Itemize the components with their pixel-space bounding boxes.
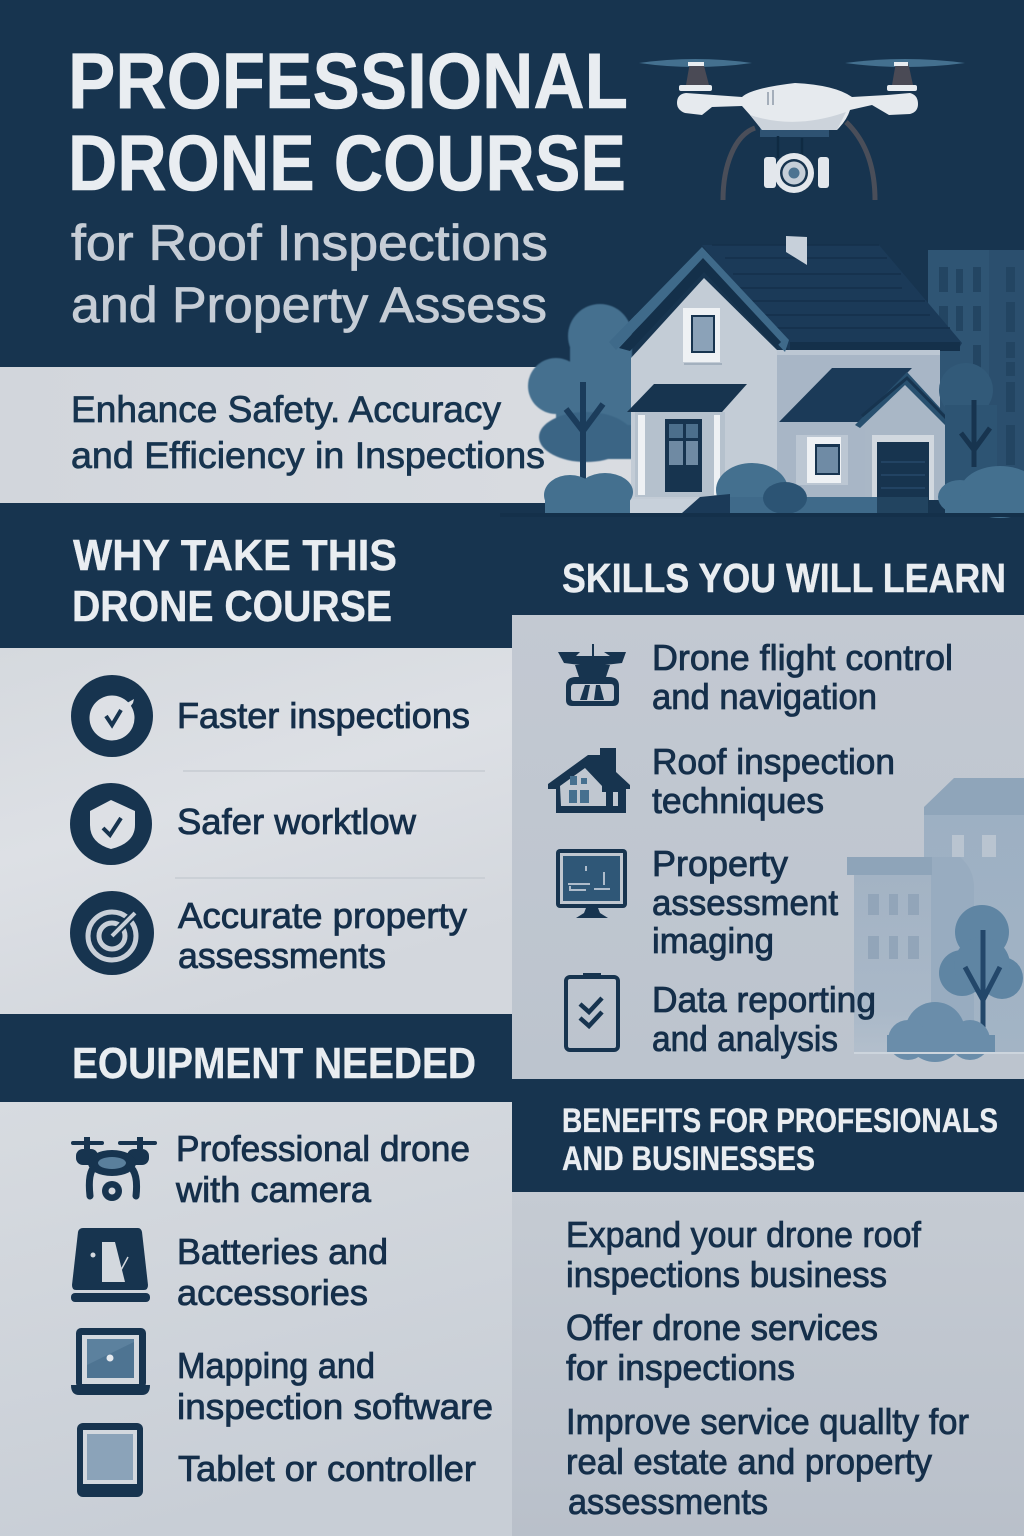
gable trim xyxy=(609,247,789,352)
icon: monitor xyxy=(556,849,627,918)
heading: equipment needed xyxy=(0,1014,512,1102)
item: mapping and inspection software: Mapping and xyxy=(177,1345,375,1386)
item: property assessment imaging xyxy=(652,843,838,961)
item: data reporting and analysis: Data reporting xyxy=(652,979,876,1020)
porch roof xyxy=(627,384,747,412)
item: accurate property assessments: assessments xyxy=(178,935,386,976)
right wing wall xyxy=(777,350,940,500)
icon: house xyxy=(548,748,630,813)
panel: subtitle band xyxy=(0,367,636,503)
heading text: equipment needed: EOUIPMENT NEEDED xyxy=(72,1039,476,1088)
item: faster inspections: Faster inspections xyxy=(177,695,470,736)
main roof xyxy=(702,245,962,350)
panel: why take this course body xyxy=(0,648,512,1014)
panel: skills body xyxy=(512,615,1024,1079)
heading: why take this drone course: WHY TAKE THIS xyxy=(73,531,397,580)
title: PROFESSIONAL xyxy=(68,36,628,125)
garage door xyxy=(872,435,934,500)
benefit: offer services: Offer drone services xyxy=(566,1307,878,1348)
illustration: right tree xyxy=(939,363,997,505)
illustration: background building behind house xyxy=(928,250,1024,500)
heading text: benefits for professionals and businesses xyxy=(562,1102,998,1178)
garage wall xyxy=(865,387,945,500)
garage roof xyxy=(779,368,912,422)
heading: benefits band xyxy=(512,1079,1024,1192)
item: drone flight control: Drone flight control xyxy=(652,637,953,678)
icon: tablet xyxy=(77,1423,143,1497)
chimney xyxy=(786,236,807,265)
item: batteries and accessories: accessories xyxy=(177,1272,368,1313)
item: tablet or controller: Tablet or controller xyxy=(178,1448,476,1489)
item: accurate property assessments xyxy=(178,895,467,976)
motors xyxy=(686,62,709,85)
title: DRONE COURSE xyxy=(68,118,626,207)
benefit: improve service quality: Improve service quallty for xyxy=(566,1401,969,1442)
benefit: improve service quality: assessments xyxy=(568,1481,768,1522)
small window xyxy=(796,435,848,485)
item: safer workflow: Safer worktlow xyxy=(177,801,417,842)
camera xyxy=(764,157,776,188)
icon: stopwatch check xyxy=(71,675,153,757)
item: drone flight control: and navigation xyxy=(652,676,877,717)
subtitle band text: Enhance Safety. Accuracy xyxy=(71,389,501,430)
illustration: drone xyxy=(639,59,965,200)
heading text: benefits for professionals and businesses: AND BUSINESSES xyxy=(562,1140,815,1178)
panel: benefits body xyxy=(512,1192,1024,1536)
item: property assessment imaging: imaging xyxy=(652,920,774,961)
item: batteries and accessories xyxy=(177,1231,388,1313)
subtitle xyxy=(71,215,548,333)
heading: why take this drone course: DRONE COURSE xyxy=(72,582,392,631)
item: data reporting and analysis xyxy=(652,979,876,1059)
item: mapping and inspection software: inspection software xyxy=(177,1386,493,1427)
benefit: offer services xyxy=(566,1307,878,1388)
benefit: expand business: Expand your drone roof xyxy=(566,1214,922,1255)
gable wall xyxy=(631,278,777,500)
benefit: improve service quality xyxy=(566,1401,969,1522)
item: accurate property assessments: Accurate property xyxy=(178,895,467,936)
item: roof inspection techniques: techniques xyxy=(652,780,824,821)
item: data reporting and analysis: and analysis xyxy=(652,1018,838,1059)
illustration: house xyxy=(605,236,962,513)
legs xyxy=(723,122,875,200)
icon: shield check xyxy=(70,783,152,865)
icon: drone flight control xyxy=(558,644,626,706)
benefit: offer services: for inspections xyxy=(566,1347,795,1388)
item: property assessment imaging: assessment xyxy=(652,882,838,923)
subtitle band text xyxy=(71,389,545,476)
item: professional drone xyxy=(175,1128,470,1210)
benefit: expand business xyxy=(566,1214,922,1295)
panel: equipment needed body xyxy=(0,1102,512,1536)
item: property assessment imaging: Property xyxy=(652,843,788,884)
propellers xyxy=(639,59,752,67)
porch xyxy=(635,412,725,497)
item: mapping and inspection software xyxy=(177,1345,493,1427)
icon: batteries xyxy=(71,1228,150,1302)
icon: target xyxy=(70,891,154,975)
icon: laptop xyxy=(71,1328,150,1395)
illustration: left tree xyxy=(528,304,633,484)
item: drone flight control xyxy=(652,637,953,717)
icon: professional drone xyxy=(71,1137,157,1201)
icon: clipboard checklist xyxy=(566,973,618,1050)
item: batteries and accessories: Batteries and xyxy=(177,1231,388,1272)
gimbal xyxy=(760,128,829,137)
illustration: skills panel background buildings xyxy=(847,778,1024,1062)
item: roof inspection techniques xyxy=(652,741,895,821)
benefit: improve service quality: real estate and property xyxy=(566,1441,932,1482)
subtitle: for Roof Inspections xyxy=(71,215,548,271)
benefit: expand business: inspections business xyxy=(566,1254,887,1295)
upper window xyxy=(683,308,720,362)
item: professional drone: with camera xyxy=(175,1169,372,1210)
illustration: ground and bushes xyxy=(500,463,1024,518)
heading: why take this drone course xyxy=(72,531,397,631)
steps xyxy=(605,499,700,513)
subtitle: and Property Assess xyxy=(71,277,547,333)
arms and body xyxy=(677,83,918,130)
subtitle band text: and Efficiency in Inspections xyxy=(71,435,545,476)
item: professional drone: Professional drone xyxy=(176,1128,470,1169)
title xyxy=(68,36,628,207)
item: roof inspection techniques: Roof inspection xyxy=(652,741,895,782)
